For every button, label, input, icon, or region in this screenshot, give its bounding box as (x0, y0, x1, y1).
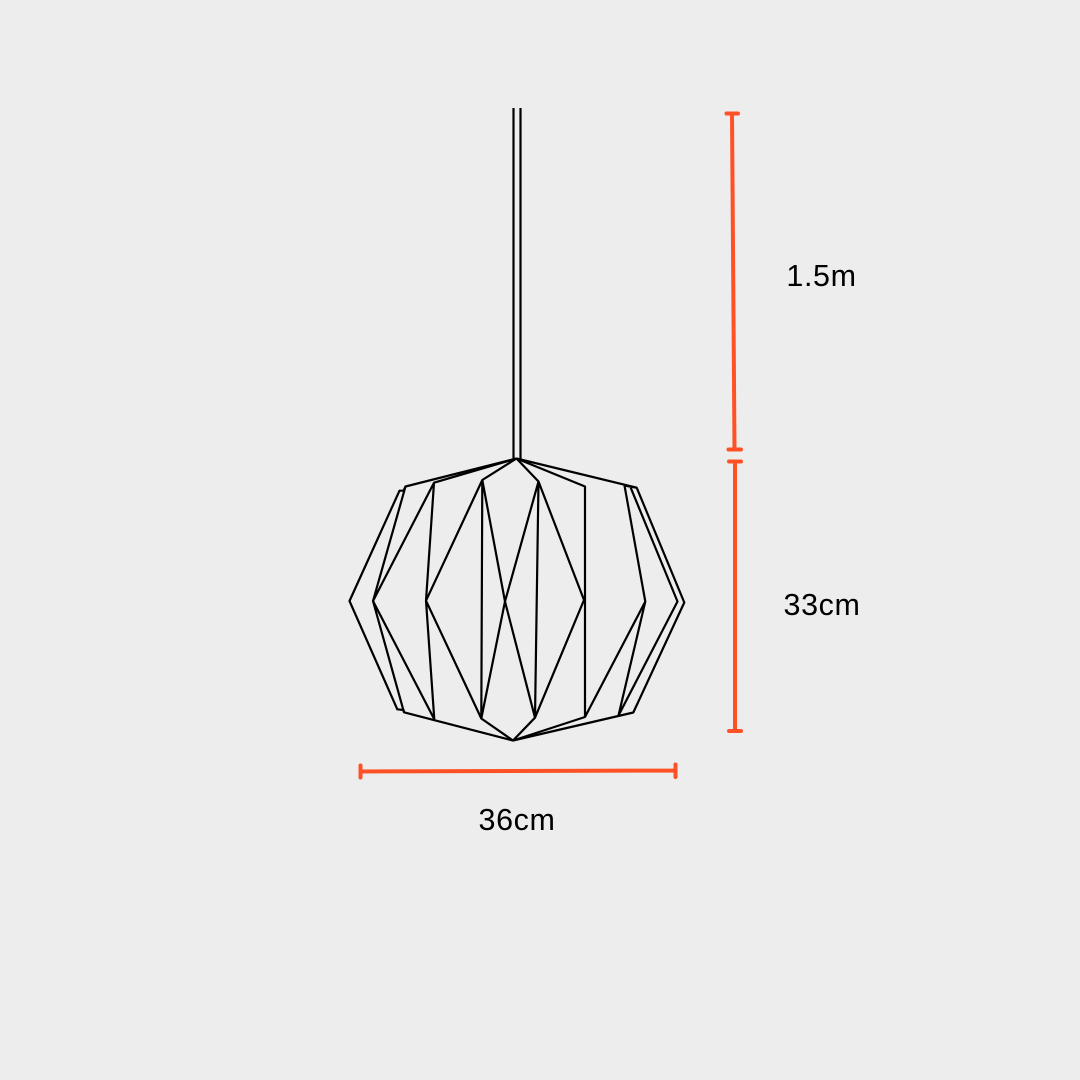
label: 1.5m: 1.5m (786, 259, 857, 293)
lamp outer outline (350, 458, 684, 740)
dimension: cord length 1.5m (726, 114, 741, 450)
label: 33cm: 33cm (784, 588, 860, 622)
icon: pendant lamp line drawing (350, 108, 684, 740)
label: 36cm: 36cm (479, 803, 555, 837)
cord (514, 108, 520, 459)
dimension: lamp width 36cm (360, 764, 676, 778)
dimension: lamp height 33cm (729, 462, 741, 731)
lamp inner folds (373, 458, 678, 740)
